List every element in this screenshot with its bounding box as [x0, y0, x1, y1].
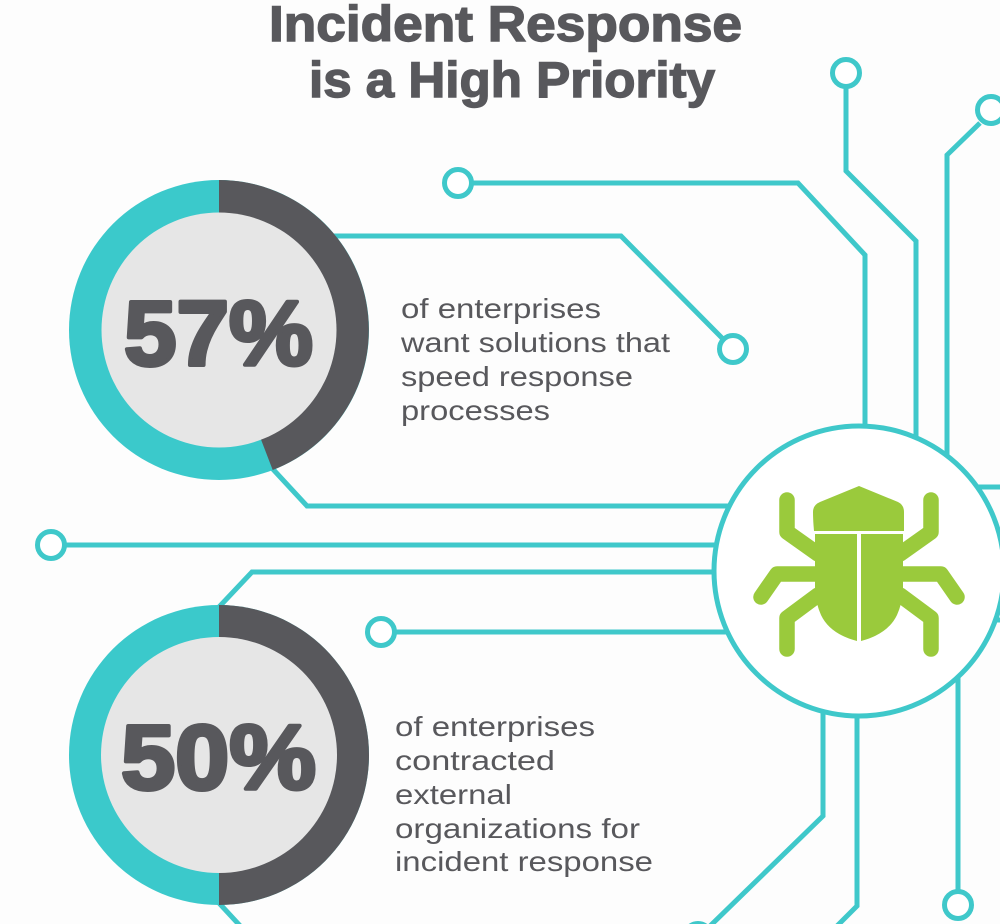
bug head [813, 486, 904, 531]
donut: 50%: 50% [121, 707, 316, 809]
text: 57% description: of enterprises [401, 293, 601, 324]
text: 57% description: processes [401, 395, 550, 426]
circuit: top right node line [947, 96, 1000, 455]
title: is a High Priority [309, 52, 715, 108]
bug left wing [815, 534, 857, 641]
circuit: right stubs [975, 487, 1000, 620]
text: 50% description: external [395, 779, 512, 810]
bug right wing [861, 534, 903, 641]
donut: 50% [69, 605, 369, 905]
circuit: bottom center line [833, 705, 857, 924]
circuit: line under 57% ring [270, 466, 730, 506]
circuit: line from 57% ring to node [330, 236, 746, 362]
text: 50% description: organizations for [395, 813, 640, 844]
donut: 57%: 57% [124, 283, 313, 385]
text: 50% description: contracted [395, 745, 555, 776]
circuit: line above 50% ring [219, 572, 720, 607]
title [269, 0, 742, 108]
circuit: middle node line [368, 618, 730, 646]
circuit: bottom right node line [944, 670, 972, 918]
text: 57% description: speed response [401, 361, 633, 392]
text: 57% description [400, 293, 670, 426]
circuit: left node line [38, 532, 720, 558]
text: 50% description: incident response [395, 846, 653, 877]
circuit: line below 50% ring [219, 903, 244, 924]
text: 50% description: of enterprises [395, 711, 595, 742]
hub circle [714, 426, 1000, 716]
text: 57% description: want solutions that [400, 327, 670, 358]
circuit: upper long node line [444, 170, 865, 435]
icon: bug [761, 486, 957, 649]
text: 50% description [395, 711, 653, 877]
donut: 57% [69, 180, 369, 480]
circuit: top node line [832, 60, 916, 440]
circuit: bottom line to offscreen node [684, 705, 823, 924]
bug legs [761, 500, 957, 649]
